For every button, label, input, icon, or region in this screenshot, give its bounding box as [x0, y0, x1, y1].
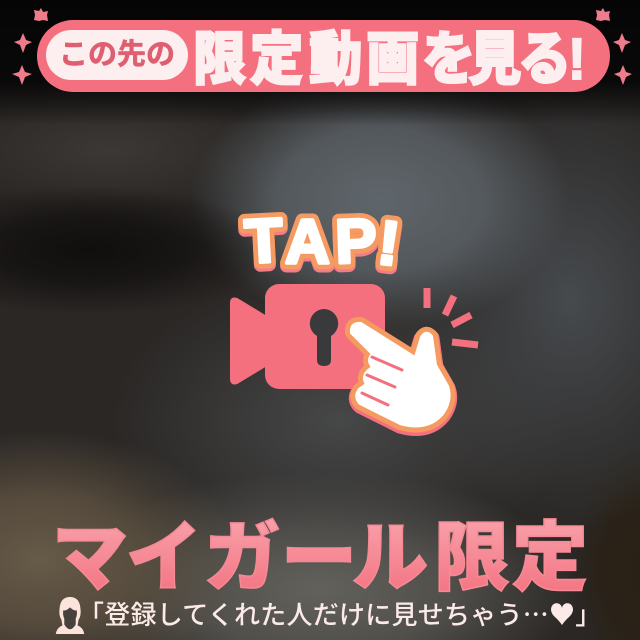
title: マイガール限定: マイガール限定 [52, 516, 588, 600]
icon: locked video camera with tapping hand [230, 284, 478, 436]
icon: video camera [231, 284, 385, 389]
icon: tapping hand [351, 323, 450, 428]
icon: woman avatar [56, 597, 84, 634]
badge: この先の: この先の [59, 39, 175, 71]
badge: この先の [46, 30, 188, 80]
TAP! label: TAP! [243, 206, 403, 279]
sparkles [12, 8, 632, 85]
icon: tap lines [427, 288, 478, 345]
banner: pink pill heading [37, 20, 610, 92]
TAP! label: TAP! [243, 206, 403, 279]
quote text: 「登録してくれた人だけに見せちゃう⋯♥」 [78, 595, 601, 632]
TAP! label: TAP! [243, 209, 403, 282]
heading text: 限定動画を見る! [193, 27, 586, 91]
